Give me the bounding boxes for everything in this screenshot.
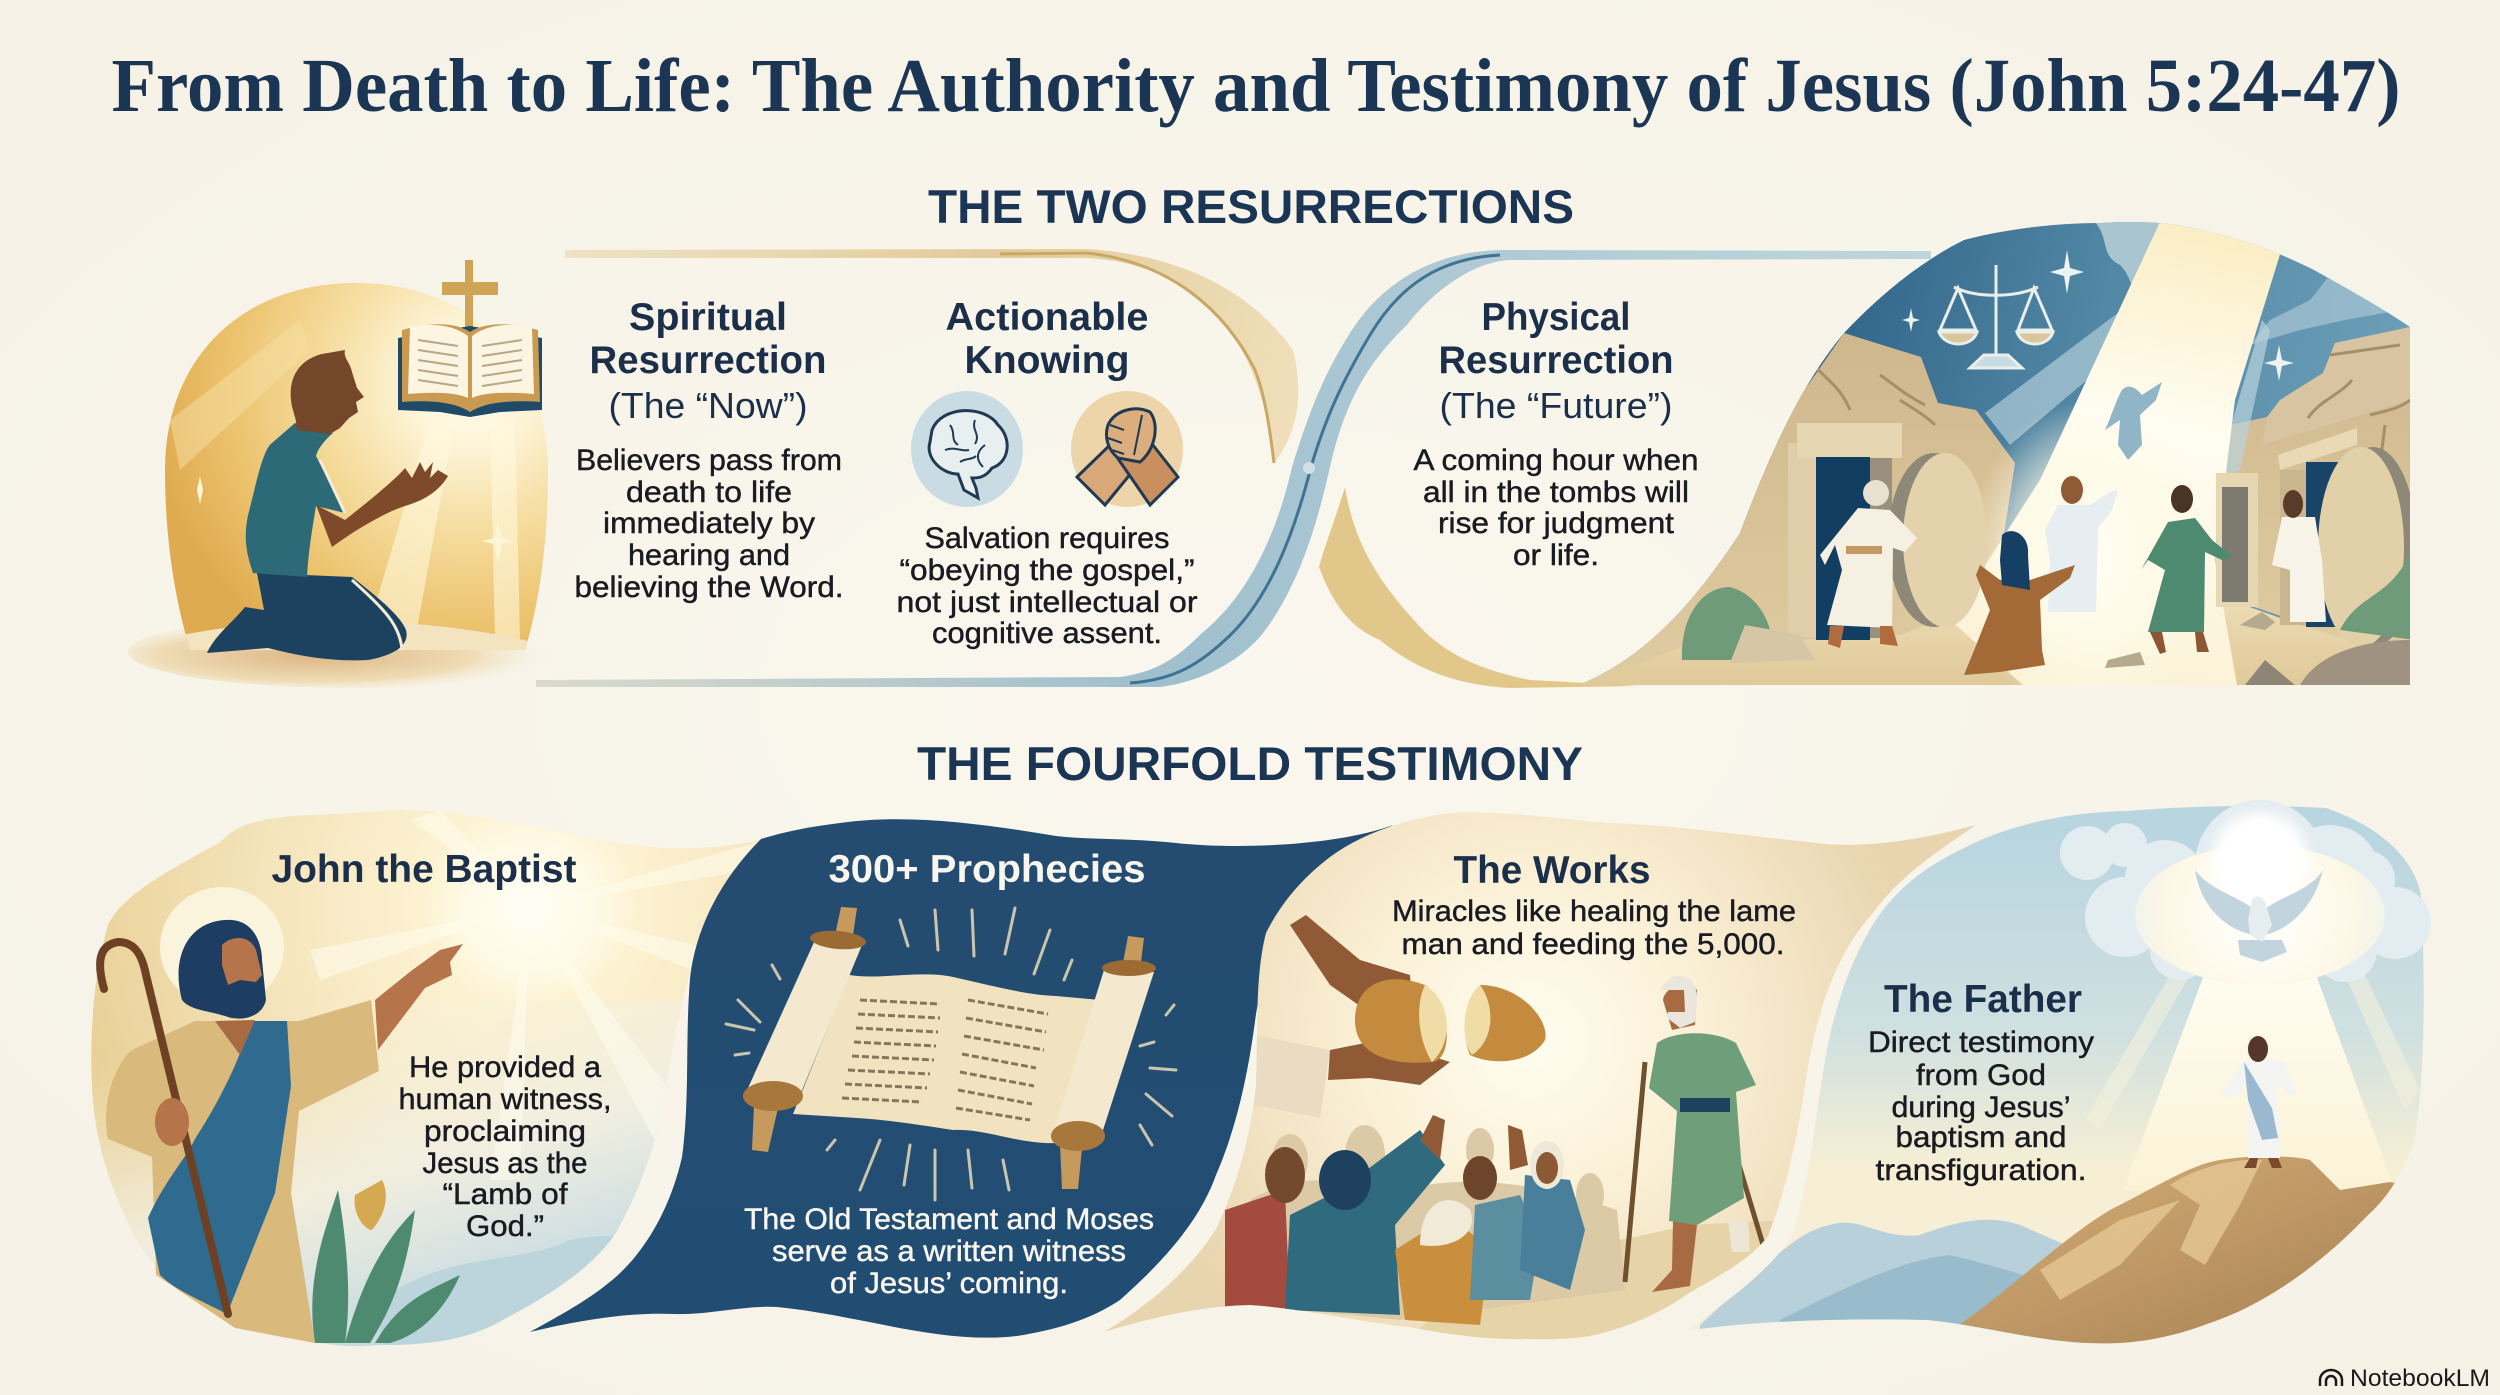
text: actionable knowing heading	[946, 296, 1148, 382]
text: prophecies body	[744, 1203, 1154, 1300]
text: spiritual resurrection: (The “Now”)	[608, 385, 808, 426]
rock: left tomb	[1570, 333, 2015, 690]
icon: cross	[442, 260, 498, 336]
text: physical resurrection: Physical	[1482, 296, 1630, 339]
text: spiritual resurrection: Resurrection	[590, 339, 826, 382]
mountain	[1960, 1156, 2430, 1350]
text: physical resurrection: Resurrection	[1438, 339, 1674, 382]
logo: notebooklm: NotebookLM	[2350, 1365, 2490, 1392]
text: john the baptist body: God.”	[466, 1210, 544, 1243]
crowd	[1225, 1115, 1625, 1325]
text: spiritual resurrection	[574, 296, 844, 604]
sun rays	[310, 812, 758, 1180]
sparkles	[1902, 250, 2294, 381]
text: actionable knowing heading: Knowing	[964, 339, 1130, 382]
text: physical resurrection: or life.	[1513, 539, 1599, 572]
text: actionable knowing body: cognitive assent.	[932, 617, 1162, 650]
icon: open book	[398, 324, 542, 417]
ground	[1419, 1220, 1774, 1340]
text: prophecies body: serve as a written witness	[772, 1235, 1126, 1268]
figure: raised man in white	[2045, 476, 2118, 612]
illustration: praying man with book	[128, 260, 572, 688]
icon: scroll rays	[726, 908, 1176, 1200]
figure: jesus	[2220, 1036, 2298, 1168]
text: john the baptist body	[398, 1051, 612, 1243]
icon: clasped hands	[1071, 391, 1183, 507]
text: physical resurrection: (The “Future”)	[1440, 385, 1672, 426]
heading: the two resurrections: THE TWO RESURRECTIONS	[928, 180, 1574, 233]
figure: man in white at right tomb	[2272, 490, 2326, 622]
text: prophecies body: The Old Testament and Moses	[744, 1203, 1154, 1236]
text: father body: during Jesus’	[1892, 1091, 2070, 1124]
text: spiritual resurrection: death to life	[626, 476, 792, 509]
text: father body: from God	[1916, 1059, 2046, 1092]
icon: cloud	[2060, 800, 2431, 985]
panel: john the baptist	[80, 800, 830, 1360]
panel: the works	[1100, 805, 1980, 1345]
heading: the fourfold testimony: THE FOURFOLD TESTIMONY	[917, 737, 1583, 790]
text: father heading: The Father	[1884, 978, 2082, 1021]
text: physical resurrection: A coming hour when	[1414, 444, 1698, 477]
text: father body: transfiguration.	[1876, 1154, 2086, 1187]
text: father body: baptism and	[1896, 1121, 2066, 1154]
figure: kneeling woman	[1964, 531, 2075, 675]
figure: man in green	[2141, 485, 2232, 654]
text: john the baptist body: “Lamb of	[442, 1178, 568, 1211]
figure: john the baptist	[100, 887, 463, 1343]
ribbon: gold	[565, 249, 1640, 688]
text: actionable knowing body	[896, 522, 1198, 650]
figure: man in white at tomb	[1820, 480, 1917, 648]
text: prophecies body: of Jesus’ coming.	[830, 1267, 1068, 1300]
text: actionable knowing body: Salvation requires	[924, 522, 1170, 555]
text: father body	[1868, 1026, 2094, 1187]
light beams	[1985, 313, 2118, 445]
icon: dove	[2195, 870, 2323, 962]
illustration: tombs and rising figures	[1579, 222, 2410, 685]
panel: the father	[1680, 800, 2440, 1350]
icon: scales of justice	[1939, 265, 2053, 368]
plant	[312, 1180, 460, 1343]
light rays	[2123, 967, 2395, 1190]
text: works body: Miracles like healing the lame	[1392, 895, 1796, 928]
text: john the baptist body: He provided a	[409, 1051, 602, 1084]
text: actionable knowing heading: Actionable	[946, 296, 1148, 339]
text: spiritual resurrection: Believers pass from	[576, 444, 842, 477]
icon: torah scroll	[743, 907, 1156, 1189]
text: spiritual resurrection: immediately by	[603, 507, 815, 540]
text: works heading: The Works	[1454, 849, 1650, 892]
text: spiritual resurrection: believing the Word.	[574, 571, 844, 604]
tomb door right	[2216, 428, 2417, 647]
text: john the baptist body: proclaiming	[424, 1115, 586, 1148]
figure: healed man on crutches	[1625, 976, 1764, 1292]
ribbon: blue	[536, 250, 1931, 687]
text: actionable knowing body: not just intellectual or	[896, 586, 1198, 619]
panel: 300+ prophecies	[520, 810, 1400, 1350]
arm and hand breaking bread	[1254, 915, 1450, 1118]
text: spiritual resurrection: hearing and	[628, 539, 790, 572]
bread loaves	[1355, 979, 1546, 1063]
text: john the baptist heading: John the Baptist	[272, 848, 577, 891]
text: father body: Direct testimony	[1868, 1026, 2094, 1059]
text: john the baptist body: human witness,	[398, 1083, 612, 1116]
hills	[1700, 1220, 2100, 1345]
text: john the baptist body: Jesus as the	[422, 1147, 588, 1180]
text: works body: man and feeding the 5,000.	[1402, 928, 1784, 961]
ground	[1584, 607, 2353, 685]
text: physical resurrection	[1414, 296, 1698, 572]
tomb door left	[1788, 423, 1987, 640]
text: prophecies heading: 300+ Prophecies	[828, 848, 1146, 891]
rock: right tomb	[2215, 327, 2410, 642]
text: physical resurrection: rise for judgment	[1438, 507, 1674, 540]
text: physical resurrection: all in the tombs will	[1423, 476, 1689, 509]
text: works body	[1392, 895, 1796, 961]
bush and rocks	[1682, 540, 2415, 685]
figure: kneeling man	[207, 350, 448, 660]
figure: ascending silhouette	[2105, 382, 2162, 460]
title: From Death to Life: The Authority and Testimony of Jesus (John 5:24-47)	[112, 44, 2400, 128]
icon: brain	[911, 391, 1023, 507]
hills	[380, 1236, 614, 1345]
text: spiritual resurrection: Spiritual	[629, 296, 787, 339]
text: actionable knowing body: “obeying the gospel,”	[900, 554, 1194, 587]
panel: two resurrections	[128, 215, 2417, 720]
